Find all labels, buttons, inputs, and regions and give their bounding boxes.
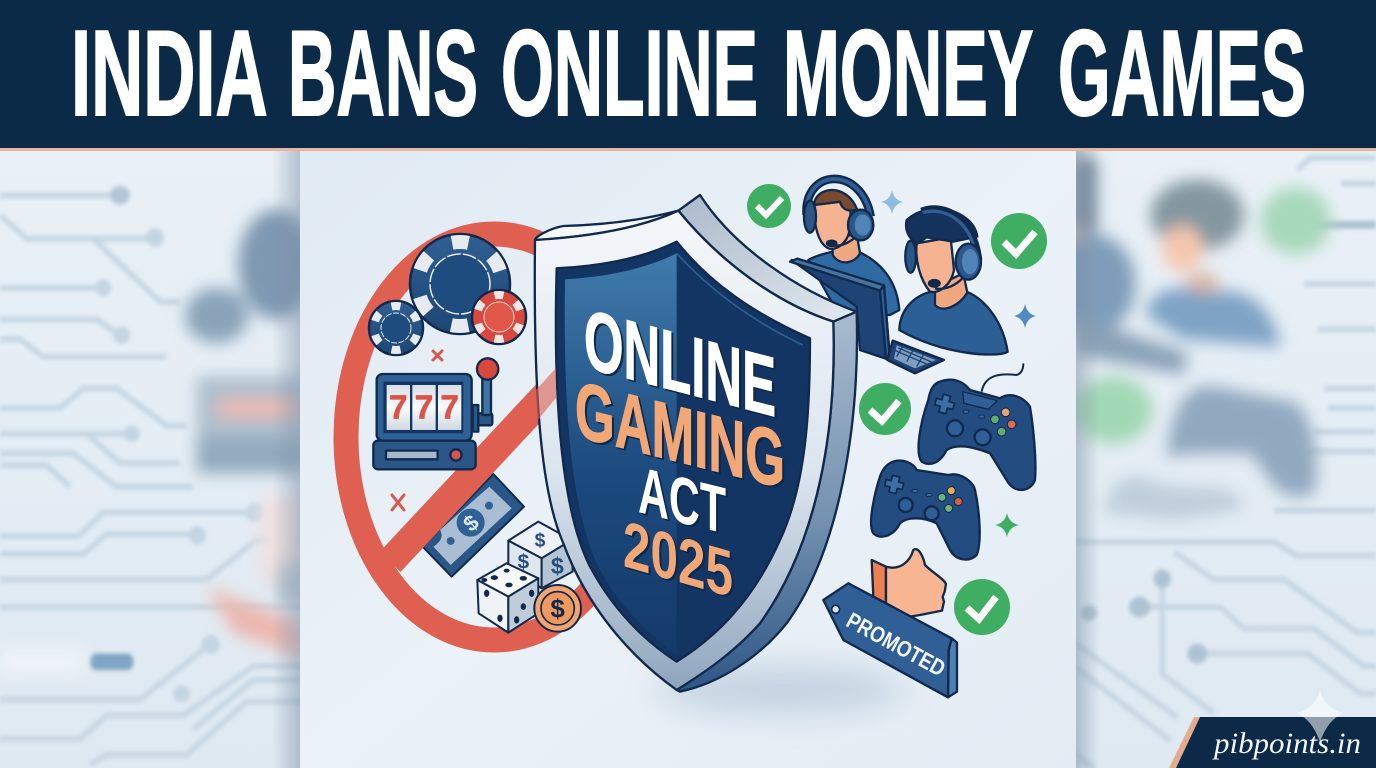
person one head [814,202,851,249]
monitor [792,260,890,360]
shield text: 2025 [623,507,733,612]
shield inner face [556,242,810,662]
promoted tag [823,583,957,697]
check badge [747,184,791,228]
person with headset, monitor and keyboard [790,179,944,373]
right blurred circuit panel [1052,158,1376,768]
title: ONLINE [501,5,758,141]
poker chips [369,234,526,355]
slot machine icon: 7 [440,389,459,426]
shield: Online Gaming Act 2025 [535,195,857,692]
slot machine icon: 7 [415,389,433,426]
banned gambling money icon: $ [458,510,484,537]
shield bevel [535,211,834,690]
check badge [954,579,1010,635]
shield lit half [565,253,677,655]
game controller one [919,363,1035,490]
centre panel [300,151,1076,768]
check badge [859,383,911,435]
big blue chip [410,234,510,334]
shield text: GAMING [575,364,785,506]
person two with headset [899,209,1008,355]
main title banner [0,0,1376,151]
gold coin: $ [550,594,565,624]
panel edge shadows [272,151,1100,768]
back die with dollar marks: $ [551,553,564,579]
title: INDIA [71,5,266,141]
promoted tag: PROMOTED [842,607,950,681]
title: MONEY [783,5,1032,141]
green check badges [747,184,1047,635]
shield extrusion side [677,312,857,692]
slot machine icon [373,358,498,469]
small blue chip [369,301,423,355]
red bar seen through shield [535,368,556,421]
back die with dollar marks: $ [518,550,530,573]
shield ground shadow [655,666,905,714]
banned gambling money icon [423,474,524,577]
thumbs up and promoted tag [823,549,957,697]
shield text: ONLINE [584,292,776,435]
sparkle stars [881,190,1036,537]
shield text [575,292,785,612]
red chip [472,290,526,344]
game controller two [871,461,980,559]
dice and coin icons [477,522,581,633]
shield text: ACT [638,453,726,549]
slot machine icon: 7 [389,389,408,426]
watermark badge: pibpoints.in [1212,727,1361,760]
back die with dollar marks: $ [535,531,546,552]
person one body [808,250,899,317]
small red cross marks [392,351,442,510]
prohibition sign [346,234,642,640]
shield top cap [535,211,678,240]
front die with pips [477,563,538,633]
back die with dollar marks [508,522,573,588]
watermark badge [1169,690,1376,768]
shield extrusion top [678,195,857,322]
keyboard [887,341,944,373]
left blurred circuit panel [0,186,315,765]
check badge [991,213,1047,269]
thumbs up hand [872,549,946,617]
title: BANS [288,5,478,141]
